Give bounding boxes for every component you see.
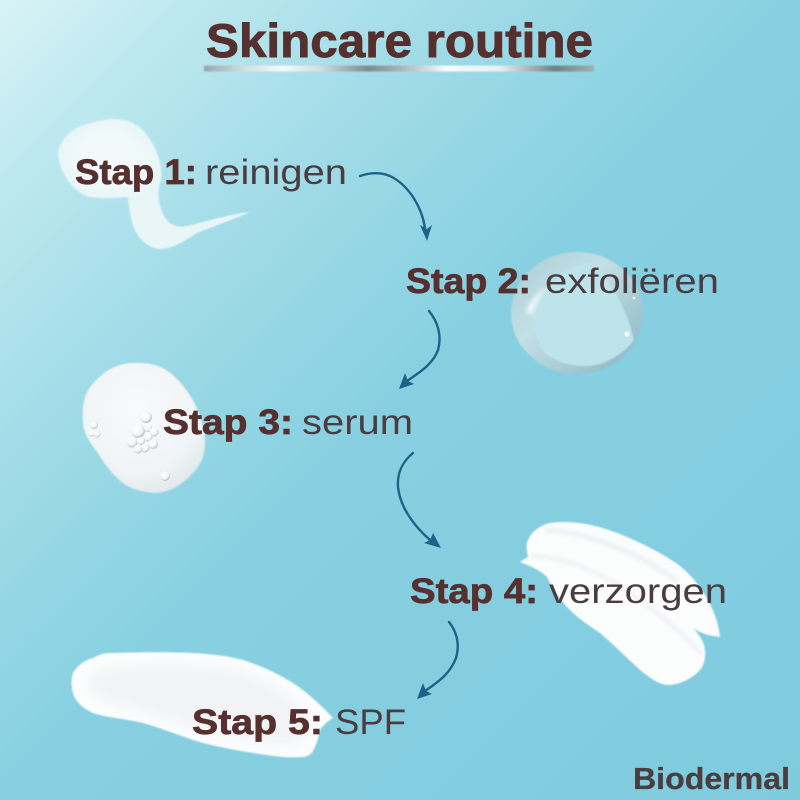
step 1 label: reinigen [205, 153, 347, 192]
step 4 label: Stap 4: [410, 572, 538, 611]
title underline [204, 66, 594, 72]
serum swatch [83, 363, 205, 493]
moisturizer swatch [520, 522, 720, 685]
arrow 1 [360, 173, 432, 241]
step 4 label: verzorgen [549, 572, 727, 611]
step 2 label: exfoliëren [545, 262, 719, 301]
step 5 label: Stap 5: [192, 703, 323, 742]
step 2 label: Stap 2: [406, 262, 531, 301]
serum bubbles [88, 411, 170, 481]
step 3 label: Stap 3: [163, 403, 293, 442]
title: Skincare routine [206, 14, 593, 67]
step 4 label [410, 572, 727, 611]
step 2 label [406, 262, 719, 301]
arrow 3 [398, 453, 441, 548]
brand logo: Biodermal [633, 761, 790, 796]
droplet swatch [511, 252, 643, 374]
step 5 label [192, 703, 406, 742]
step 5 label: SPF [335, 703, 406, 742]
step 3 label: serum [302, 403, 413, 442]
arrow 4 [417, 622, 458, 699]
step 3 label [163, 403, 413, 442]
cleanser swatch [58, 119, 250, 249]
arrow 2 [399, 311, 440, 389]
sunscreen swatch [72, 652, 333, 757]
step 1 label [75, 153, 347, 192]
step 1 label: Stap 1: [75, 153, 197, 192]
